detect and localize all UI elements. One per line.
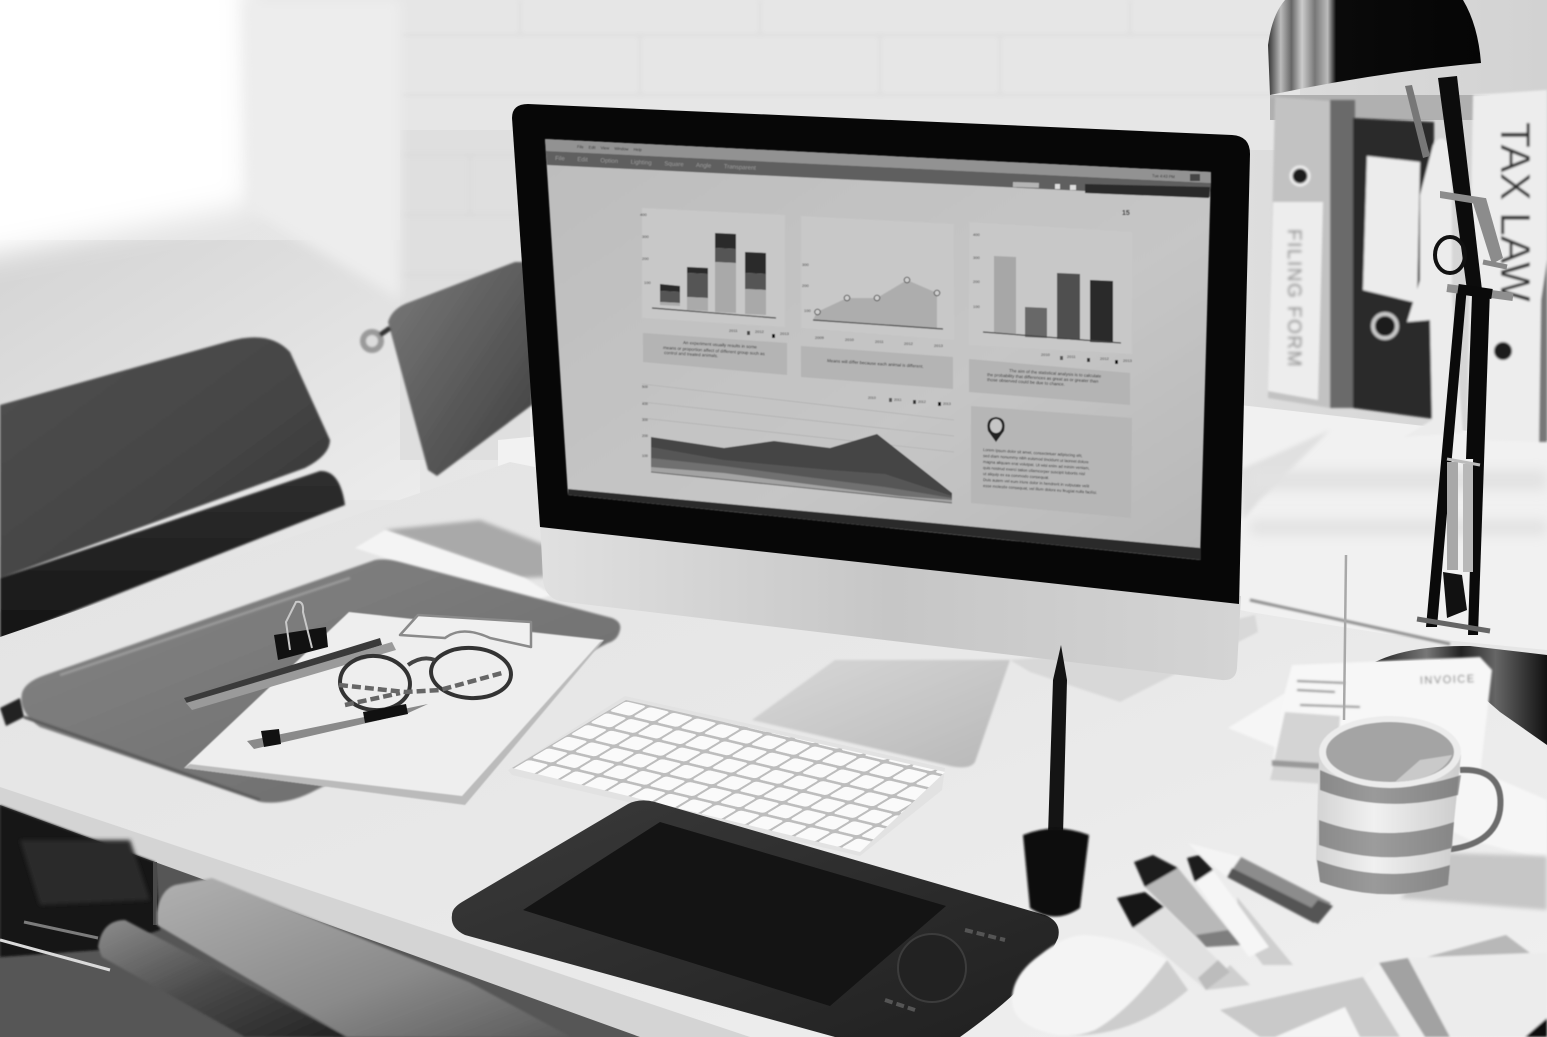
caption: chart 1 [643,333,787,375]
chart: stacked bars: 300 [642,234,649,239]
thin metal rod [1344,555,1346,720]
caption: chart 3: The aim of the statistical analysis is to calculate [1009,368,1102,379]
chart: area with markers [801,216,954,348]
main desk [0,462,1547,1037]
lamp base [1375,646,1547,745]
chart: area with markers: 2010 [845,337,855,342]
stylus pen and holder [1023,645,1089,916]
top grey triangle [1427,935,1530,957]
papers bottom right [1220,935,1547,1037]
chart: stacked bars: 2012 [755,329,765,334]
chart: stacked bars [640,208,790,338]
white sheet inset [1275,1007,1360,1037]
lamp shade [1268,0,1481,95]
icon: map pin [987,417,1005,442]
window frame light [245,0,400,300]
mannequin figure [1404,138,1463,437]
chart: stacked area: 2011 [894,398,902,402]
caption: chart 2 [801,346,953,389]
chart: stacked area: 2013 [943,402,951,406]
folded strip [1363,963,1440,1037]
chart: four bars: 300 [973,255,980,260]
caption: chart 3: the probability that differences as great as or greater than [987,372,1099,384]
info text: ut aliquip ex ea commodo consequat. [983,471,1049,480]
marker 4 [1188,843,1333,924]
info text: quis nostrud exerci tation ullamcorper suscipit lobortis nisl [983,465,1085,476]
info text: Lorem ipsum dolor sit amet, consectetuer adipiscing elit, [983,447,1083,458]
chart: stacked area: 300 [642,418,648,422]
lamp hinge tube [1440,191,1503,264]
markers [1117,843,1333,990]
glasses [338,646,512,713]
chart: stacked area [642,384,954,503]
chart: area with markers: 2009 [815,335,825,340]
back table [498,405,1547,650]
monitor [512,104,1250,680]
chart: stacked area: 200 [642,434,648,438]
chart: four bars: 200 [973,279,980,284]
caption: chart 1: means or proportion affect of different group such as [663,345,766,356]
mug rim [1319,716,1461,788]
invoice table [1270,712,1340,785]
table edge line [1250,600,1450,644]
background wall [0,0,1547,620]
screen display [545,139,1211,560]
chair behind desk [360,262,532,476]
tablet buttons [885,930,1005,1010]
mug body [1316,755,1461,894]
invoice word: INVOICE [1420,673,1476,687]
window [0,0,250,270]
menu text: File Edit View Window Help [577,144,643,152]
taskbar reflection [568,489,1201,560]
toolbar [546,151,1211,197]
info text: esse molestie consequat, vel illum dolore eu feugiat nulla facilisi. [983,483,1097,495]
chart: four bars: 100 [973,304,980,309]
binders on shelf [1268,90,1547,442]
marker 2 [1117,892,1230,990]
lamp upper arm [1438,76,1482,290]
marker 1 [1134,855,1241,947]
info text: magna aliquam erat volutpat. Ut wisi enim ad minim veniam, [983,459,1090,471]
info panel [971,406,1132,518]
binder: tax law [1467,90,1547,442]
tablet dial [898,934,966,1002]
glasses case outline [400,615,531,647]
drawing tablet [452,800,1059,1037]
binder: tax law: TAX LAW [1492,122,1539,302]
caption: chart 1: An experiment usually results in some [683,340,758,350]
chart: stacked bars: 100 [644,280,651,285]
white large sheet [1408,953,1547,1037]
lamp spring ring [1435,237,1465,273]
binder clip [274,602,328,660]
binder: grey: FILING FORM [1283,229,1304,368]
monitor bezel [512,104,1250,604]
keyboard [508,696,945,856]
chart: stacked area: 2012 [918,400,926,404]
binder: grey [1268,97,1355,408]
left office chair [0,337,345,640]
pencils [184,638,396,710]
pen [247,704,428,749]
chart: stacked bars: 2013 [780,331,790,336]
chart: area with markers: 2011 [875,339,884,344]
info text: Duis autem vel eum iriure dolor in hendrerit in vulputate velit [983,477,1090,489]
dark toolbar end [1085,184,1210,198]
monitor chin [540,520,1241,680]
mug [1316,716,1500,894]
paper under envelope [355,530,552,603]
chart: stacked area: 2010 [868,396,876,400]
caption: chart 1: control and treated animals. [664,350,718,358]
chart: area with markers: 200 [802,283,809,288]
title bar [545,139,1211,183]
lamp [1268,0,1547,745]
marker 3 [1187,855,1269,957]
grey sheet [1220,977,1400,1037]
page number: 15 [1122,210,1130,217]
chart: area with markers: 2013 [934,343,944,348]
leather folder [0,559,620,803]
foreground chair [98,878,571,1037]
chart: stacked area: 100 [642,454,648,458]
lamp neck [1405,85,1430,158]
chart: area with markers: 2012 [904,341,914,346]
under-desk shadow and floor [0,805,640,1037]
brick wall lines [400,0,1280,275]
binder: black [1353,118,1434,419]
grey triangle [1379,958,1450,1037]
tablet active area [523,822,946,1006]
status text: Tue 4:43 PM [1152,173,1175,179]
lamp pivot bar [1447,288,1513,297]
lower paper [1228,690,1547,860]
chart: stacked bars: 200 [642,256,649,261]
caption: chart 3 [969,359,1130,405]
chart: area with markers: 100 [804,308,811,313]
marker shadows [1206,897,1293,990]
notebook behind stand [1010,615,1258,702]
desk front edge [0,787,750,1037]
chart: stacked bars: 400 [640,212,647,217]
mug shadow [1400,853,1547,910]
info text [983,447,1097,495]
chart: stacked bars: 2011 [729,328,738,333]
lamp lower arms [1417,286,1490,635]
tablet corner dark [1525,1018,1547,1037]
caption: chart 2: Means will differ because each animal is different. [827,358,924,369]
invoice sheet [1270,657,1492,780]
chart: four bars: 400 [973,232,980,237]
mouse and shadow [1012,935,1188,1036]
mug handle [1445,770,1500,850]
monitor stand [752,660,1010,767]
chart: four bars: 2013 [1123,358,1133,363]
chart: four bars: 2012 [1100,356,1110,361]
caption: chart 3: those observed could be due to chance. [987,377,1065,387]
chart: stacked area: 400 [642,402,648,406]
chart: stacked area: 500 [642,385,648,389]
notepad [184,612,604,805]
chart: four bars: 2010 [1041,352,1051,357]
chart: area with markers: 300 [802,262,809,267]
info text: sed diam nonummy nibh euismod tincidunt ut laoreet dolore [983,453,1090,465]
chart: four bars: 2011 [1067,354,1076,359]
invoice papers [1228,657,1547,860]
toolbar text: File Edit Option Lighting Square Angle Transparent [555,156,756,172]
envelope on desk [385,520,545,578]
chart: four bars [969,222,1133,364]
